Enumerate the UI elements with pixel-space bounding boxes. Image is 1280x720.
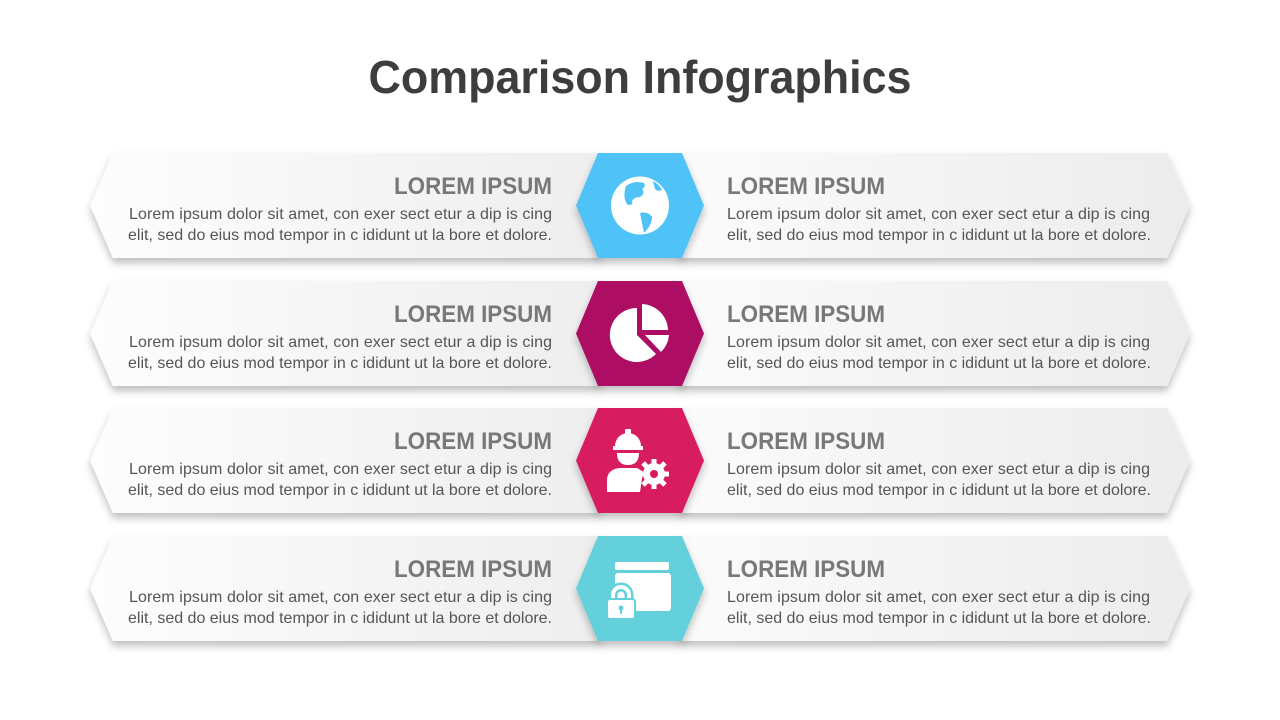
right text: Lorem ipsum dolor sit amet, con exer sect etur a dip is cing [727,589,1150,606]
right banner [680,281,1190,386]
left text: Lorem ipsum dolor sit amet, con exer sect etur a dip is cing [129,589,552,606]
right text: LOREM IPSUM [727,301,885,328]
hexagon: locked box [576,536,704,641]
hexagon: globe [576,153,704,258]
icon: pie chart [610,304,669,362]
right banner [680,408,1190,513]
left text: elit, sed do eius mod tempor in c ididunt ut la bore et dolore. [128,355,552,372]
right text [727,301,1151,372]
icon: globe [611,176,669,234]
left text: LOREM IPSUM [394,173,552,200]
icon: worker with gear [607,429,669,492]
right text: elit, sed do eius mod tempor in c ididunt ut la bore et dolore. [727,482,1151,499]
left text: Lorem ipsum dolor sit amet, con exer sect etur a dip is cing [129,461,552,478]
left banner [90,281,600,386]
left text: LOREM IPSUM [394,301,552,328]
left banner [90,536,600,641]
right text: LOREM IPSUM [727,556,885,583]
right banner [680,153,1190,258]
right text [727,428,1151,499]
right text: LOREM IPSUM [727,428,885,455]
row 1 [90,153,1190,258]
left text: elit, sed do eius mod tempor in c ididunt ut la bore et dolore. [128,227,552,244]
right text [727,173,1151,244]
left text [128,301,552,372]
right text: elit, sed do eius mod tempor in c ididunt ut la bore et dolore. [727,610,1151,627]
icon: box with lock [607,562,671,619]
right text [727,556,1151,627]
left text: LOREM IPSUM [394,556,552,583]
right text: elit, sed do eius mod tempor in c ididunt ut la bore et dolore. [727,355,1151,372]
left banner [90,408,600,513]
right text: Lorem ipsum dolor sit amet, con exer sect etur a dip is cing [727,334,1150,351]
right text: Lorem ipsum dolor sit amet, con exer sect etur a dip is cing [727,206,1150,223]
left text: elit, sed do eius mod tempor in c ididunt ut la bore et dolore. [128,610,552,627]
row 2 [90,281,1190,386]
hexagon: worker [576,408,704,513]
left text: Lorem ipsum dolor sit amet, con exer sect etur a dip is cing [129,206,552,223]
left text: elit, sed do eius mod tempor in c ididunt ut la bore et dolore. [128,482,552,499]
right banner [680,536,1190,641]
row 4 [90,536,1190,641]
right text: Lorem ipsum dolor sit amet, con exer sect etur a dip is cing [727,461,1150,478]
row 3 [90,408,1190,513]
left text: Lorem ipsum dolor sit amet, con exer sect etur a dip is cing [129,334,552,351]
left text: LOREM IPSUM [394,428,552,455]
right text: LOREM IPSUM [727,173,885,200]
hexagon: pie chart [576,281,704,386]
left text [128,428,552,499]
left text [128,173,552,244]
left text [128,556,552,627]
left banner [90,153,600,258]
title: Comparison Infographics [368,51,912,103]
right text: elit, sed do eius mod tempor in c ididunt ut la bore et dolore. [727,227,1151,244]
